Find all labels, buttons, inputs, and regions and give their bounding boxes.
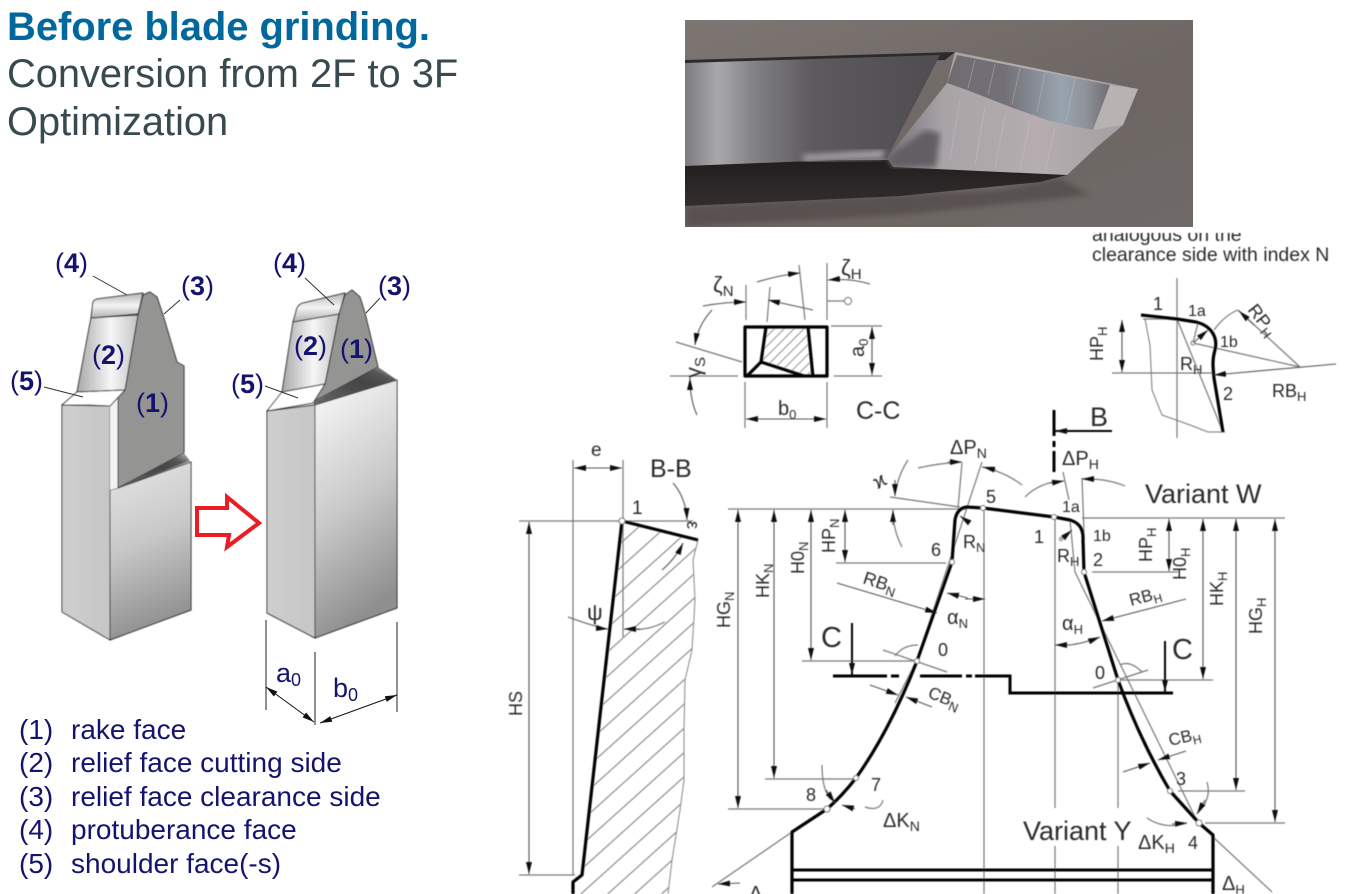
relief face <box>282 314 339 392</box>
right labels: R <box>1057 546 1070 566</box>
leader lines <box>44 276 380 398</box>
note text: analogous on the <box>1092 224 1242 246</box>
labels: H <box>1297 389 1306 404</box>
right labels: H <box>1178 548 1193 557</box>
side face <box>267 405 315 638</box>
legend item 4: (4) <box>19 814 53 845</box>
diagram: section B-B <box>506 440 703 894</box>
left labels: 8 <box>806 785 816 805</box>
labels: H <box>1193 362 1202 377</box>
left labels: HK <box>753 573 773 598</box>
legend item 1: (1) <box>19 714 53 745</box>
labels: ε <box>683 521 703 529</box>
left labels: N <box>796 542 811 551</box>
blade side face <box>685 55 940 166</box>
left labels: α <box>947 607 959 629</box>
right labels: 0 <box>1095 663 1105 683</box>
section outline <box>573 521 698 894</box>
right labels: C <box>1172 634 1193 666</box>
white strip <box>110 393 118 490</box>
b0 label: b <box>333 673 348 703</box>
right labels: (1) <box>340 334 373 364</box>
labels: 1 <box>632 498 643 519</box>
legend item 3: (3) <box>19 781 53 812</box>
C-C labels: 0 <box>856 339 871 346</box>
arrow: conversion <box>197 497 259 547</box>
left labels: (5) <box>10 366 43 396</box>
legend item 2: relief face cutting side <box>71 747 342 778</box>
subtitle line 2: Optimization <box>7 100 228 144</box>
right labels: RB <box>1127 585 1155 610</box>
diagram: radius detail <box>1087 224 1336 438</box>
legend item 3: relief face clearance side <box>71 781 381 812</box>
illustration: 2F tool <box>62 292 191 640</box>
legend item 5: (5) <box>19 848 53 879</box>
base lines <box>792 870 1213 880</box>
right labels: H <box>1191 732 1203 748</box>
right labels: CB <box>1167 726 1194 750</box>
subtitle line 1: Conversion from 2F to 3F <box>7 52 458 96</box>
section outline <box>745 327 827 377</box>
right labels: (5) <box>231 369 264 399</box>
left labels: ΔP <box>950 437 977 459</box>
section line C <box>833 676 1173 693</box>
C-C labels: 0 <box>789 407 796 422</box>
right labels <box>1023 402 1269 894</box>
left labels: H0 <box>788 551 808 574</box>
left labels: (4) <box>55 248 88 278</box>
extension lines <box>266 620 397 725</box>
right labels: HP <box>1136 537 1156 562</box>
right labels: H <box>1144 528 1159 537</box>
labels: R <box>1180 354 1193 374</box>
blade body underside <box>685 160 1067 206</box>
left labels <box>714 437 996 894</box>
photo: ground blade tip <box>685 20 1193 227</box>
right labels: (2) <box>294 331 327 361</box>
rake face <box>118 292 184 488</box>
dimension arrows <box>690 273 872 419</box>
right labels: H <box>1254 598 1269 607</box>
left labels: ΔK <box>883 810 910 832</box>
blade shadow <box>685 178 1090 227</box>
left labels: 7 <box>871 775 881 795</box>
tip facet <box>1093 85 1138 130</box>
left labels: CB <box>926 683 955 710</box>
labels: 1 <box>1153 294 1163 314</box>
left labels: R <box>963 532 976 552</box>
labels: RB <box>1272 381 1297 401</box>
legend item 5: shoulder face(-s) <box>71 848 281 879</box>
labels: HS <box>506 691 526 716</box>
rainbow ground face <box>947 55 1110 130</box>
a0 label: 0 <box>291 670 301 690</box>
right labels: 1 <box>1034 527 1044 547</box>
right labels: H <box>1074 622 1083 637</box>
legend <box>19 714 381 879</box>
left labels: N <box>976 540 985 555</box>
right labels: ΔK <box>1138 832 1165 854</box>
C-C labels <box>681 255 900 425</box>
ground face shadow <box>887 130 940 167</box>
labels: 1b <box>1220 334 1238 351</box>
torn edge <box>668 540 698 894</box>
labels: ψ <box>587 600 603 625</box>
profile curve <box>1141 315 1223 432</box>
right labels: H <box>1089 456 1099 472</box>
section mark B <box>1052 410 1056 472</box>
wedge <box>313 367 397 405</box>
left labels: N <box>946 698 961 716</box>
left labels: N <box>959 616 968 631</box>
protuberance face <box>91 293 143 318</box>
ground relief face <box>887 52 1138 175</box>
left labels: (3) <box>181 271 214 301</box>
labels <box>506 440 703 716</box>
a0 label: a <box>276 658 291 688</box>
photo background <box>685 20 1193 227</box>
labels: H <box>1095 327 1110 336</box>
C-C labels: γ <box>681 367 706 378</box>
note text: clearance side with index N <box>1092 244 1329 266</box>
C-C labels: S <box>692 357 709 367</box>
left labels: 5 <box>986 487 996 507</box>
left labels: HG <box>714 601 734 628</box>
shoulder face <box>62 390 125 406</box>
C-C labels: a <box>847 346 869 357</box>
right labels: 4 <box>1188 833 1198 853</box>
side highlight patch <box>803 150 885 161</box>
lower right face <box>110 462 191 640</box>
dimension lines <box>670 263 882 428</box>
right labels: HK <box>1207 581 1227 606</box>
relief face cutting side <box>77 315 138 392</box>
C-C labels: ζ <box>841 255 851 280</box>
left labels: (2) <box>92 340 125 370</box>
left labels: N <box>827 519 842 528</box>
right face <box>315 380 397 638</box>
left labels <box>10 248 214 418</box>
left labels: N <box>884 583 897 600</box>
profile outline <box>792 507 1213 894</box>
right labels: 3 <box>1176 769 1186 789</box>
dimensions a0 b0 <box>266 620 397 725</box>
dim arrows <box>529 468 687 874</box>
left labels: N <box>722 592 737 601</box>
right labels: H <box>1070 554 1079 569</box>
left labels: 6 <box>931 540 941 560</box>
left labels: ϰ <box>869 469 890 494</box>
right labels: (3) <box>378 271 411 301</box>
right labels: H <box>1165 840 1175 856</box>
right labels: HG <box>1246 607 1266 634</box>
points <box>824 506 1202 826</box>
C-C labels: b <box>778 398 789 420</box>
heading: before blade grinding: Before blade grinding. <box>7 5 430 49</box>
left labels: N <box>910 818 920 834</box>
right labels: 1a <box>1062 499 1080 516</box>
left labels: N <box>761 564 776 573</box>
note text <box>1092 224 1329 266</box>
left labels: C <box>821 622 842 654</box>
C-C labels: H <box>851 266 862 283</box>
hatched area <box>573 521 698 894</box>
blade top edge <box>685 52 955 63</box>
legend item 4: protuberance face <box>71 814 297 845</box>
C-C labels: C-C <box>856 397 900 425</box>
right labels: B <box>1090 402 1108 432</box>
right labels: Variant W <box>1145 479 1262 509</box>
callout numbers and leaders <box>10 248 411 418</box>
dimension arrows <box>718 431 1275 884</box>
labels <box>1087 294 1306 404</box>
rake face <box>313 290 378 402</box>
grinding streaks <box>950 60 1075 172</box>
legend item 1: rake face <box>71 714 186 745</box>
labels: 2 <box>1223 384 1233 404</box>
left labels: HP <box>819 528 839 553</box>
b0 label: 0 <box>348 685 358 705</box>
legend item 2: (2) <box>19 747 53 778</box>
side face <box>62 405 110 640</box>
labels: B-B <box>650 455 692 483</box>
right labels: (4) <box>273 248 306 278</box>
protuberance face <box>293 293 345 322</box>
left labels: N <box>977 445 987 461</box>
shoulder face <box>267 384 325 411</box>
C-C labels: ζ <box>713 272 723 297</box>
thin verticals and datums <box>712 460 1285 894</box>
b0 arrow <box>320 695 397 723</box>
a0 arrow <box>266 687 314 722</box>
right labels: H <box>1152 591 1164 607</box>
labels: HP <box>1087 336 1107 361</box>
wedge <box>118 453 190 488</box>
arrows <box>1122 311 1336 375</box>
right labels: ΔP <box>1062 448 1089 470</box>
right labels: 2 <box>1093 550 1103 570</box>
hatched core <box>761 327 813 376</box>
diagram: tooth profile <box>712 402 1285 894</box>
thin construction lines <box>1112 278 1300 438</box>
right labels <box>231 248 411 399</box>
construction lines <box>519 460 693 875</box>
C-C labels: N <box>723 283 734 300</box>
labels: RP <box>1244 300 1275 332</box>
labels: H <box>1257 325 1274 341</box>
title <box>7 5 458 144</box>
right labels: Variant Y <box>1023 816 1132 846</box>
left labels: RB <box>861 568 891 595</box>
left labels: (1) <box>136 388 169 418</box>
labels: e <box>591 440 602 461</box>
right labels: 1b <box>1093 528 1111 545</box>
right labels: α <box>1062 613 1074 635</box>
illustration: 3F tool <box>267 290 397 638</box>
left labels: 0 <box>938 640 948 660</box>
diagram: section C-C <box>670 255 900 428</box>
right labels: H0 <box>1170 557 1190 580</box>
labels: 1a <box>1188 303 1206 320</box>
right labels: H <box>1215 572 1230 581</box>
